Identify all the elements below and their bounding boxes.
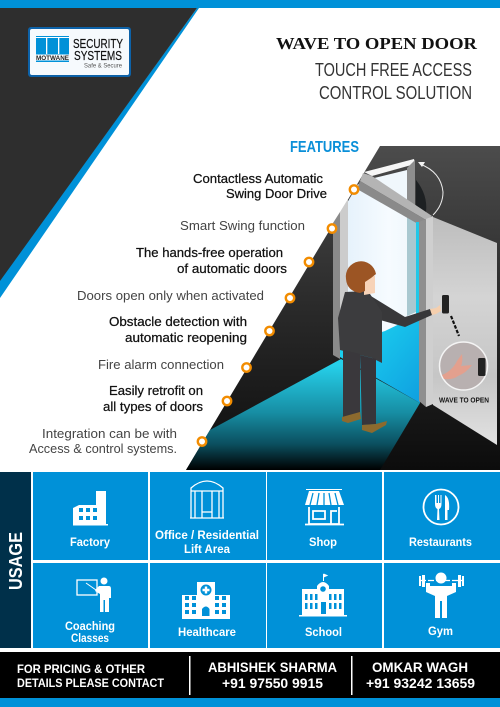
usage: gym: Gym [428, 624, 453, 638]
feature: retrofit: all types of doors [103, 399, 204, 414]
usage section background [0, 470, 500, 652]
left door frame inner [340, 199, 348, 350]
bottom blue bar [0, 698, 500, 707]
usage: school: School [305, 625, 342, 639]
feature: integration: Access & control systems. [29, 441, 177, 456]
feature: obstacle detection [109, 314, 247, 345]
usage: healthcare: Healthcare [178, 625, 236, 639]
contact: omkar: +91 93242 13659 [366, 676, 475, 691]
feature: contactless [193, 171, 327, 201]
feature: retrofit [103, 383, 204, 414]
usage: office lift: Lift Area [184, 542, 230, 556]
usage: coaching classes: Coaching [65, 619, 115, 633]
feature: integration [29, 426, 177, 456]
usage: restaurants [384, 472, 500, 560]
shoes [342, 412, 361, 423]
wave to open label: WAVE TO OPEN [439, 396, 489, 404]
logo: SYSTEMS [74, 49, 122, 63]
person [338, 261, 441, 433]
dark room background [186, 146, 500, 470]
feature: doors open: Doors open only when activated [77, 288, 264, 303]
glass door [347, 184, 416, 343]
usage: office lift [150, 472, 266, 560]
usage: factory: Factory [70, 535, 110, 549]
logo [28, 27, 131, 77]
orange timeline dots [198, 185, 358, 446]
feature: contactless: Contactless Automatic [193, 171, 323, 186]
cyan wall [340, 305, 420, 403]
arm [366, 293, 432, 327]
usage: factory [33, 472, 148, 560]
usage: restaurants: Restaurants [409, 535, 472, 549]
legs [343, 350, 360, 417]
contact: omkar [366, 660, 475, 691]
contact: omkar: OMKAR WAGH [372, 660, 468, 675]
swing arc arrow [420, 164, 443, 215]
feature: smart swing: Smart Swing function [180, 218, 305, 233]
top blue bar [0, 0, 500, 8]
pricing note [17, 664, 164, 690]
usage: gym [384, 563, 500, 648]
usage: coaching classes [33, 563, 148, 648]
door jamb dark [419, 219, 426, 407]
dashed arrow [451, 316, 459, 336]
door jamb light [426, 216, 433, 407]
contact: abhishek: ABHISHEK SHARMA [208, 660, 337, 675]
feature: fire alarm: Fire alarm connection [98, 357, 224, 372]
glass reflection band [407, 216, 416, 316]
features heading: FEATURES [290, 139, 359, 156]
hand [430, 305, 441, 315]
logo: Safe & Secure [84, 64, 123, 70]
logo: MOTWANE [36, 56, 69, 62]
feature: retrofit: Easily retrofit on [109, 383, 203, 398]
face [364, 276, 375, 295]
title: WAVE TO OPEN DOOR [276, 34, 478, 53]
feature: hands-free: The hands-free operation [136, 245, 283, 260]
open leaf side [407, 160, 415, 210]
open leaf glass [370, 170, 407, 202]
wave circle [440, 342, 488, 390]
usage: shop [267, 472, 382, 560]
contact: abhishek: +91 97550 9915 [222, 676, 323, 691]
head frame arm lower [357, 181, 426, 224]
usage: office lift: Office / Residential [155, 528, 259, 542]
hair [346, 261, 376, 293]
pricing note: FOR PRICING & OTHER [17, 664, 146, 676]
usage side label: USAGE [6, 532, 26, 590]
torso [338, 291, 382, 363]
left door frame outer [333, 212, 340, 359]
feature: obstacle detection: Obstacle detection with [109, 314, 247, 329]
feature: obstacle detection: automatic reopening [125, 330, 247, 345]
feature: integration: Integration can be with [42, 426, 177, 441]
contact: abhishek [208, 660, 337, 691]
title: CONTROL SOLUTION [319, 83, 472, 103]
usage: school [267, 563, 382, 648]
cyan strip [416, 222, 420, 315]
contact footer [0, 652, 500, 698]
silver door panel [433, 217, 497, 445]
pricing note: DETAILS PLEASE CONTACT [17, 678, 164, 690]
usage: healthcare [150, 563, 266, 648]
usage side label [0, 472, 31, 648]
arrow head [418, 162, 425, 167]
blue diagonal stripe [0, 8, 199, 298]
feature: hands-free [136, 245, 288, 276]
open leaf top edge [364, 159, 415, 176]
title [276, 34, 478, 103]
door sensor [442, 295, 449, 314]
teal floor [186, 359, 420, 470]
dark corner panel [0, 8, 197, 281]
door illustration [186, 146, 500, 470]
head frame arm upper [360, 173, 432, 220]
usage: shop: Shop [309, 535, 337, 549]
logo: SECURITY [73, 37, 124, 51]
feature: hands-free: of automatic doors [177, 261, 288, 276]
usage: coaching classes: Classes [71, 631, 109, 645]
feature: contactless: Swing Door Drive [226, 186, 327, 201]
door shadow [416, 180, 426, 212]
